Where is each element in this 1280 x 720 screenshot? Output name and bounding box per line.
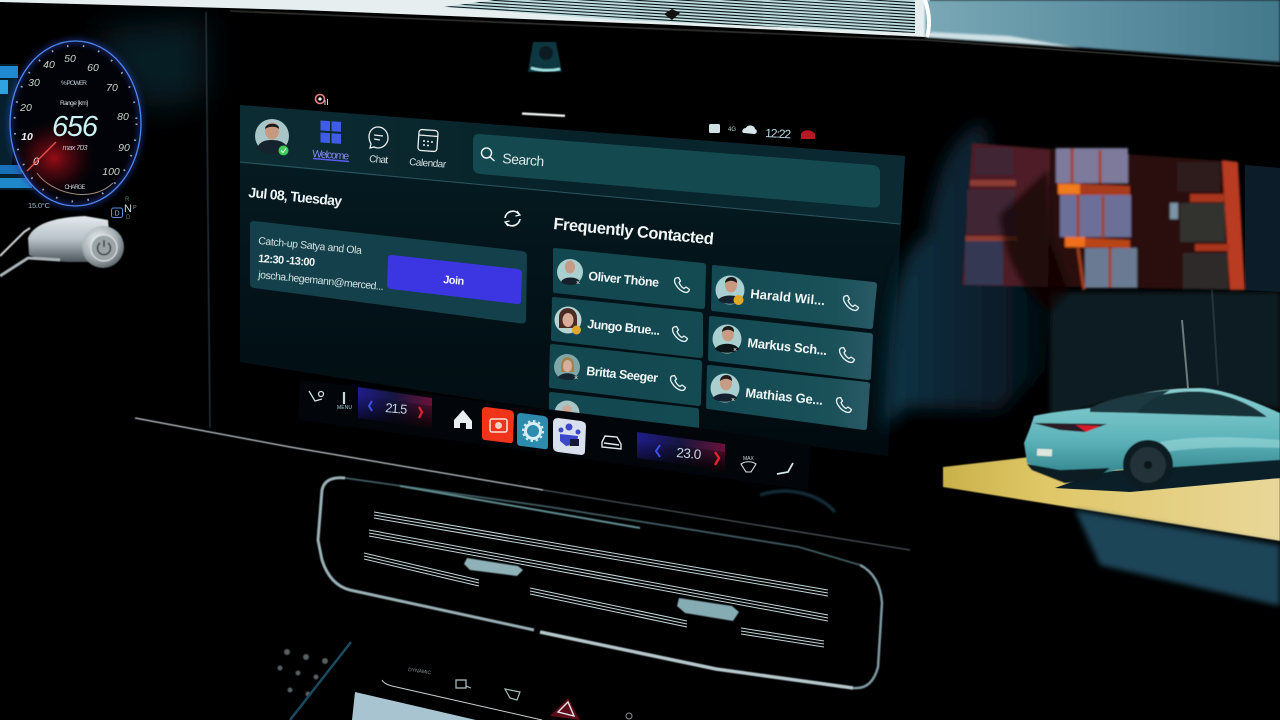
divider bbox=[240, 162, 900, 224]
gauge: scale numbers: 30 bbox=[28, 77, 40, 89]
icon: welcome grid bbox=[320, 120, 341, 144]
climate: right temperature bbox=[637, 432, 725, 470]
nav: welcome tab: Welcome bbox=[312, 148, 350, 163]
contact: Mathias Ge: Mathias Ge... bbox=[745, 385, 824, 408]
climate: left temperature bbox=[358, 387, 432, 428]
icon: magnifier bbox=[482, 148, 494, 161]
gauge: max range: max 703 bbox=[62, 143, 88, 152]
button: join: Join bbox=[443, 274, 465, 288]
icon: max defrost: MAX bbox=[743, 456, 754, 462]
icon: drive assist bbox=[456, 680, 471, 688]
heading: frequently contacted: Frequently Contacted bbox=[553, 215, 715, 248]
contact: Markus Sch: Markus Sch... bbox=[747, 335, 828, 358]
climate: left temperature: 21.5 bbox=[385, 400, 408, 417]
trim: top dashboard band bbox=[0, 0, 1280, 62]
avatar: signed-in user bbox=[255, 119, 289, 156]
icon: hazard bbox=[550, 698, 580, 720]
contact: Harald Wil bbox=[711, 265, 877, 329]
gauge: charge arc bbox=[37, 173, 113, 195]
gauge: scale numbers: 80 bbox=[117, 111, 129, 123]
icon: parking assist bbox=[505, 689, 520, 700]
nav: chat tab bbox=[369, 127, 389, 166]
meeting card bbox=[250, 221, 527, 324]
app: teams bbox=[553, 418, 586, 455]
photo: hooded reflection bbox=[884, 122, 1050, 430]
cluster: gear indicator: D bbox=[114, 210, 120, 218]
photo: dark sky beside building bbox=[1245, 165, 1280, 292]
menu: climate menu bbox=[337, 392, 352, 411]
trim: screen frame lines bbox=[135, 11, 1280, 550]
app: camera bbox=[482, 407, 514, 443]
photo: dark area below building bbox=[1050, 292, 1280, 418]
gauge: power label: % POWER bbox=[61, 80, 87, 87]
icon: lock bbox=[626, 713, 632, 719]
icon: chat bubble bbox=[369, 127, 388, 148]
icon: camera status bbox=[709, 124, 720, 133]
icon: red car status bbox=[801, 130, 815, 139]
icon: seat heating right bbox=[777, 463, 793, 474]
contact: Jungo Brue bbox=[551, 297, 703, 358]
gauge: scale numbers: 20 bbox=[19, 102, 32, 114]
gauge: scale numbers: 10 bbox=[21, 131, 33, 143]
photo: lamp post bbox=[1182, 290, 1218, 388]
gauge: red charge glow bbox=[12, 120, 96, 196]
contact: Oliver Thöne: × bbox=[576, 280, 580, 287]
cluster: gear indicator: R bbox=[125, 197, 130, 203]
panel: header strip bbox=[240, 105, 905, 224]
air vent: left adjuster knob bbox=[464, 558, 523, 576]
gauge: range label: Range [km] bbox=[60, 100, 88, 107]
button: join bbox=[387, 255, 522, 304]
text: dynamic select: DYNAMIC bbox=[408, 667, 432, 676]
photo: hood shadow over building bbox=[1000, 170, 1070, 312]
search bar bbox=[473, 134, 880, 208]
gauge: scale numbers: 90 bbox=[118, 142, 130, 154]
contact: Jungo Brue: Jungo Brue... bbox=[587, 317, 661, 338]
climate: right temperature: 23.0 bbox=[676, 445, 702, 462]
nav: calendar tab bbox=[409, 129, 447, 171]
contact: Mathias Ge bbox=[706, 365, 870, 430]
icon: microphone notification bbox=[316, 94, 328, 105]
icon: 4G signal: 4G bbox=[728, 127, 736, 133]
air vent: right adjuster knob bbox=[677, 598, 739, 621]
text: meeting title: Catch-up Satya and Ola bbox=[258, 235, 363, 257]
gauge: charge label: CHARGE bbox=[64, 185, 86, 191]
photo: car shadow bbox=[1055, 458, 1280, 492]
cluster: gear indicator: P bbox=[133, 205, 137, 211]
gauge: scale numbers: 60 bbox=[87, 62, 99, 74]
cluster: gear indicator: N bbox=[124, 203, 132, 215]
photo: sunlit ground bbox=[943, 457, 1280, 541]
icon: home bbox=[454, 410, 472, 429]
trim: air grille at top bbox=[444, 0, 915, 33]
gauge: needle bbox=[27, 142, 56, 171]
cluster: gear indicator: D bbox=[126, 215, 131, 221]
air vent: frame bbox=[318, 478, 882, 688]
gauge: scale numbers: 50 bbox=[64, 53, 76, 65]
contact: partially hidden bbox=[549, 392, 699, 432]
reflection: lower screen glare bbox=[760, 491, 835, 512]
console: mesh speaker dots bbox=[278, 649, 328, 696]
gauge: scale numbers: 70 bbox=[106, 82, 118, 94]
photo: teal car bbox=[1024, 388, 1280, 490]
photo: right facade bbox=[1170, 160, 1245, 290]
icon: max defrost bbox=[741, 456, 756, 472]
photo: orange bay windows bbox=[1056, 148, 1137, 290]
gauge: instrument cluster range dial bbox=[0, 41, 141, 206]
icon: car menu bbox=[602, 436, 621, 449]
heading: date: Jul 08, Tuesday bbox=[248, 184, 343, 209]
search bar: Search bbox=[502, 150, 545, 169]
clock: 12:22 bbox=[765, 126, 792, 141]
cluster: gear indicator bbox=[112, 197, 137, 221]
text: meeting time: 12:30 -13:00 bbox=[258, 253, 315, 269]
gauge: range value: 656 bbox=[52, 111, 99, 143]
photo: red building bbox=[962, 143, 1245, 312]
icon: calendar bbox=[418, 129, 438, 152]
cluster: outside temperature: 15.0°C bbox=[28, 201, 51, 210]
console: lower display bbox=[352, 680, 542, 720]
gauge: scale numbers: 0 bbox=[33, 156, 40, 168]
air vent: slats bbox=[364, 512, 828, 647]
console: drive mode buttons bbox=[408, 667, 632, 720]
camera: driver monitoring lens bbox=[522, 42, 565, 117]
contact: Britta Seeger: Britta Seeger bbox=[586, 364, 659, 385]
control: chrome steering stalk bbox=[0, 216, 124, 276]
gauge: scale numbers: 100 bbox=[102, 166, 120, 178]
icon: seat climate left bbox=[309, 391, 324, 401]
gauge: scale numbers bbox=[19, 53, 130, 178]
dock: bottom app bar bbox=[298, 380, 810, 490]
contact: Mathias Ge: × bbox=[731, 397, 735, 404]
contact: Oliver Thöne: Oliver Thöne bbox=[588, 269, 660, 290]
photo: car wheel bbox=[1123, 440, 1173, 490]
status bar bbox=[709, 124, 815, 141]
nav: calendar tab: Calendar bbox=[409, 157, 447, 171]
reflection: upper left of cluster screen bbox=[100, 18, 205, 110]
photo: blue shadow area bbox=[1075, 510, 1280, 606]
nav: welcome tab bbox=[312, 120, 350, 163]
icon: refresh bbox=[505, 211, 520, 226]
nav: chat tab: Chat bbox=[369, 154, 389, 166]
app: settings bbox=[517, 413, 548, 449]
text: meeting organiser: joscha.hegemann@merced... bbox=[257, 269, 384, 293]
contact: Britta Seeger bbox=[549, 344, 702, 406]
gauge: scale numbers: 40 bbox=[43, 59, 55, 71]
menu: climate menu: MENU bbox=[337, 405, 352, 411]
contact: Britta Seeger: × bbox=[574, 375, 578, 382]
contact: Markus Sch: × bbox=[733, 347, 737, 354]
console: trim diagonal bbox=[290, 642, 351, 720]
panel: central touchscreen bbox=[240, 105, 905, 456]
contact: Markus Sch bbox=[708, 316, 873, 380]
cluster: blue navigation fragment bbox=[0, 64, 38, 190]
control: power button bbox=[82, 226, 124, 268]
icon: cloud bbox=[742, 125, 757, 134]
contact: Oliver Thöne bbox=[553, 248, 706, 309]
contact: Harald Wil: Harald Wil... bbox=[750, 286, 826, 308]
